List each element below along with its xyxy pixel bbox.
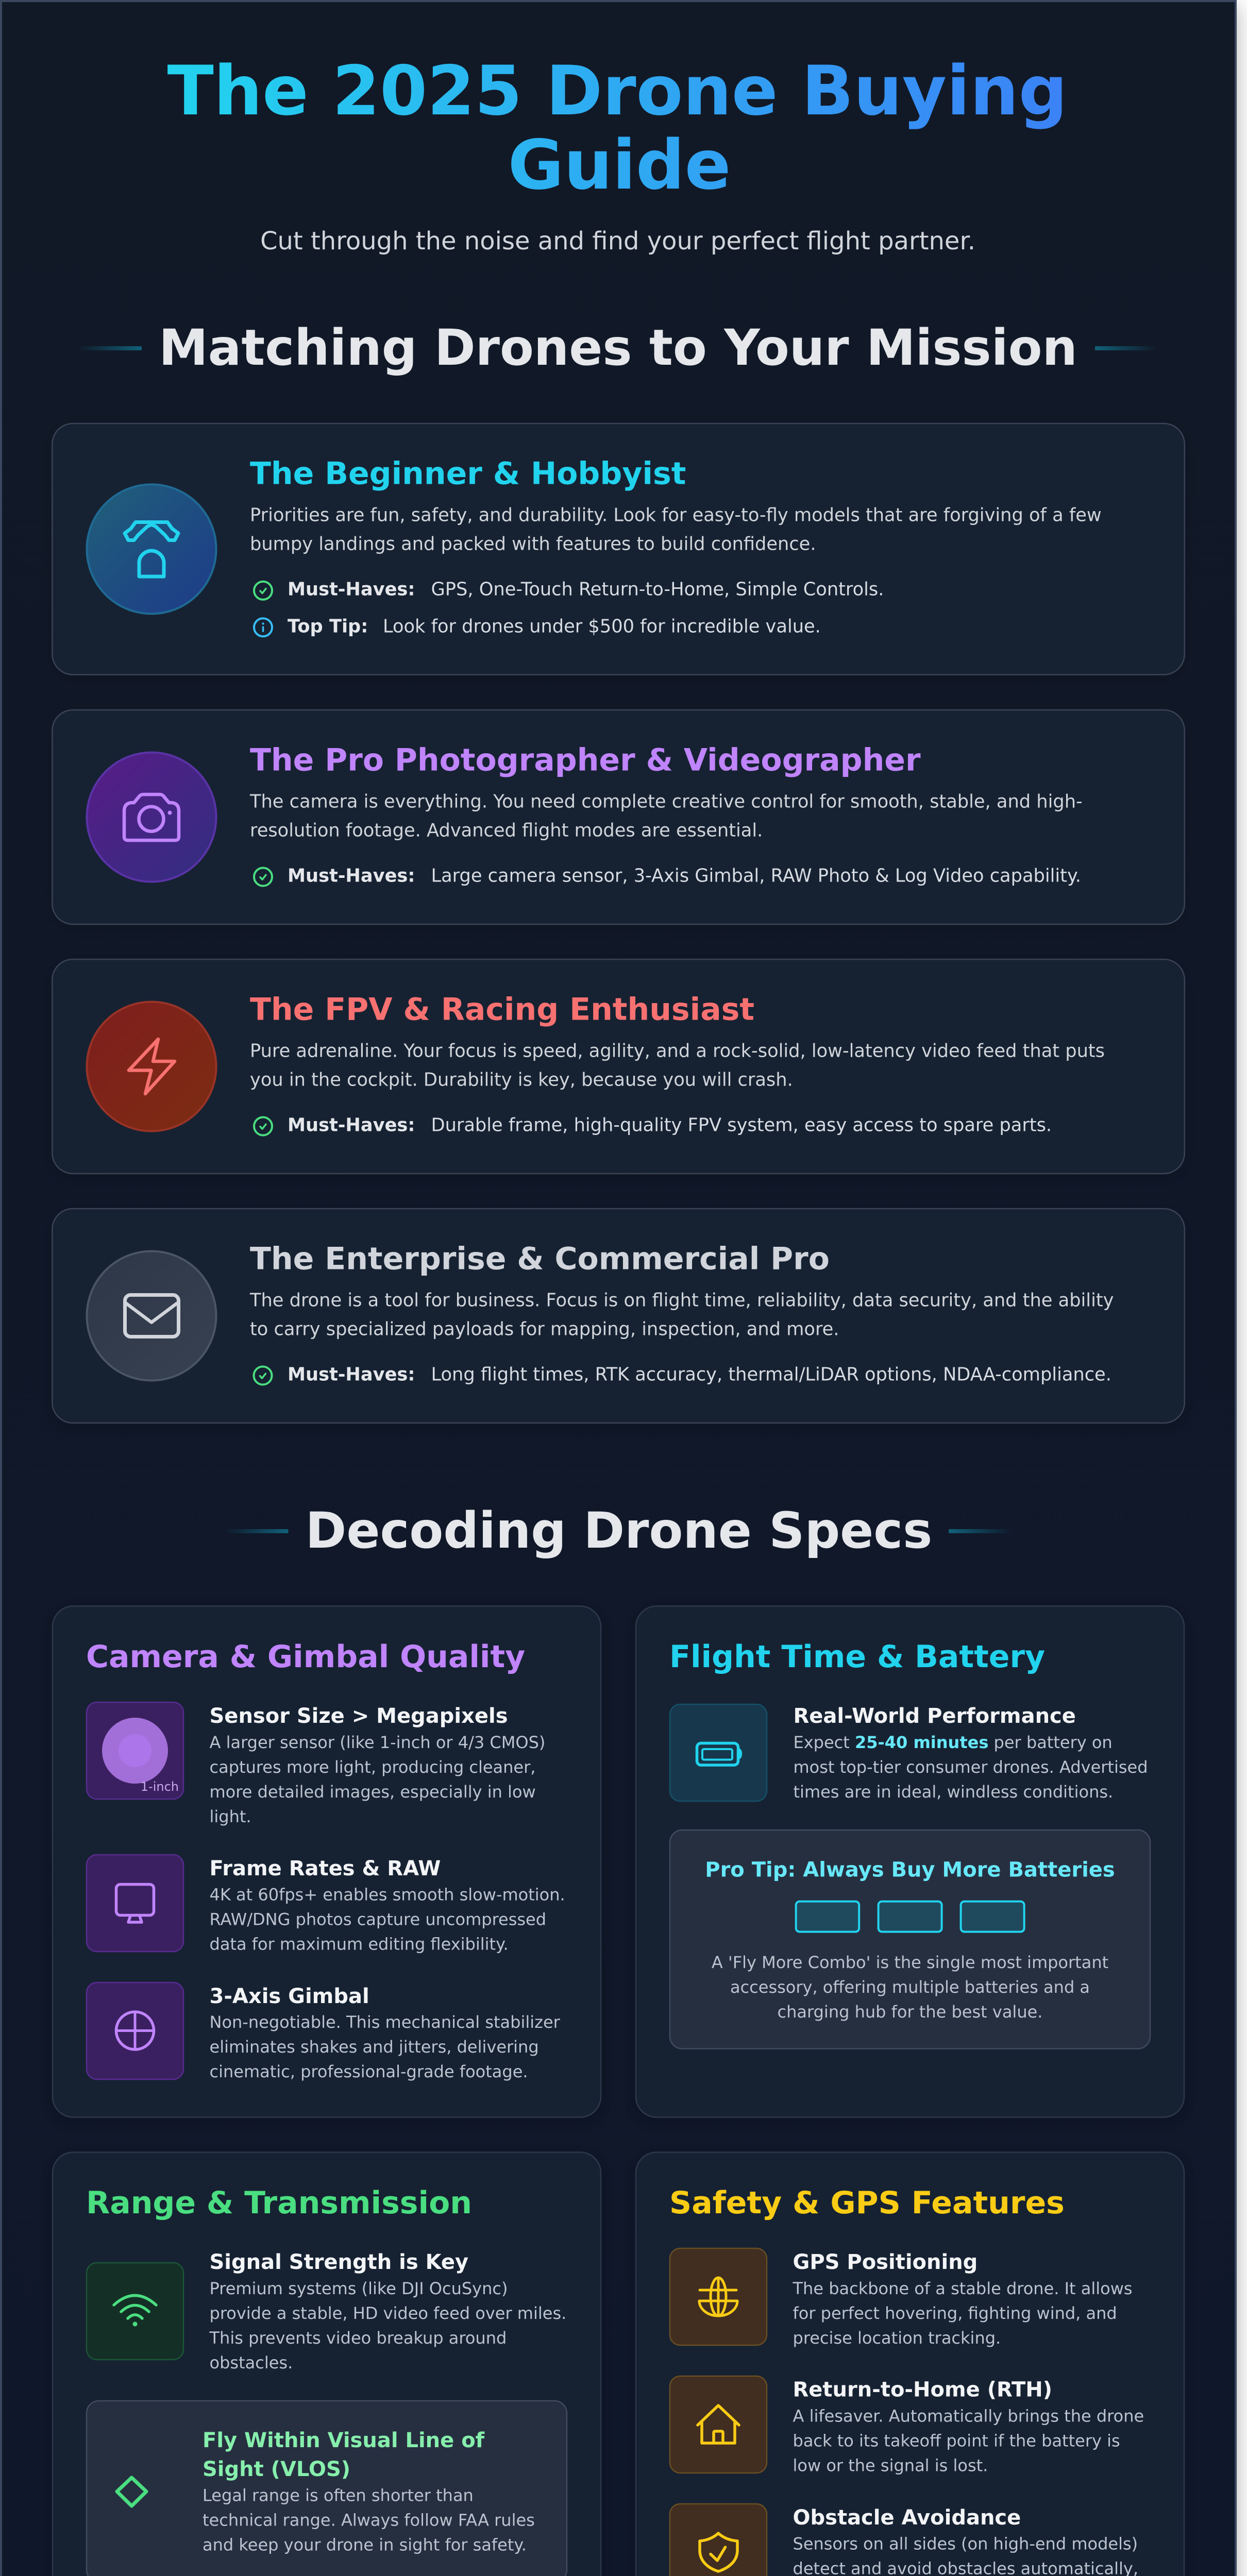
callout: vlos: technical range. Always follow FAA rules [203,2510,535,2530]
item: obstacle avoidance [670,2504,1138,2576]
item: sensor size: more detailed images, especially in low [209,1782,536,1802]
heading: decoding specs: Decoding Drone Specs [306,1502,932,1560]
item: sensor size: light. [209,1807,251,1826]
icon: camera [87,752,216,882]
title: Guide [508,126,731,205]
item: rth: Return-to-Home (RTH) [793,2378,1052,2402]
card title: The Beginner & Hobbyist [250,455,686,492]
panel: camera and gimbal [53,1606,601,2117]
callout: pro tip: accessory, offering multiple batteries and a [730,1977,1090,1997]
panel title: Camera & Gimbal Quality [86,1639,525,1675]
item: sensor size: A larger sensor (like 1-inch or 4/3 CMOS) [209,1733,545,1752]
top tip row: Top Tip: [288,616,368,637]
item: sensor size [87,1702,545,1826]
item: real-world performance: most top-tier consumer drones. Advertised [794,1757,1148,1777]
callout: pro tip: Pro Tip: Always Buy More Batteries [705,1858,1115,1882]
callout: vlos: Fly Within Visual Line of [203,2429,485,2452]
title [167,52,1067,205]
item: real-world performance: Real-World Performance [794,1704,1076,1728]
item: rth: A lifesaver. Automatically brings the drone [793,2406,1144,2426]
card description: The camera is everything. You need complete creative control for smooth, stable, and high- [249,791,1083,812]
item: rth: back to its takeoff point if the battery is [793,2431,1120,2450]
item: gimbal: 3-Axis Gimbal [209,1985,369,2008]
card description: to carry specialized payloads for mapping, inspection, and more. [250,1319,839,1340]
callout: vlos: Sight (VLOS) [203,2458,350,2481]
icon: diamond [117,2478,146,2506]
heading: matching drones: Matching Drones to Your Mission [159,319,1077,377]
subtitle: Cut through the noise and find your perfect flight partner. [260,227,975,256]
item: real-world performance: times are in ideal, windless conditions. [794,1782,1113,1802]
must-haves row: GPS, One-Touch Return-to-Home, Simple Controls. [431,579,884,600]
panel: beginner card [52,423,1185,675]
callout: pro tip: charging hub for the best value. [778,2002,1042,2022]
item: signal strength [87,2250,566,2372]
card title: The FPV & Racing Enthusiast [250,992,754,1028]
card description [250,1041,1105,1091]
card description [250,505,1102,555]
item: gimbal [87,1982,561,2081]
item: gps: GPS Positioning [793,2250,978,2274]
card description: resolution footage. Advanced flight modes are essential. [250,820,763,841]
card title: The Enterprise & Commercial Pro [250,1241,830,1277]
item: frame rates: data for maximum editing flexibility. [209,1934,509,1954]
card description: Pure adrenaline. Your focus is speed, agility, and a rock-solid, low-latency video feed that puts [250,1041,1105,1061]
item: signal strength: This prevents video breakup around [209,2328,507,2348]
item: real-world performance: Expect 25-40 minutes per battery on [794,1733,1113,1752]
card description: The drone is a tool for business. Focus is on flight time, reliability, data security, and the ability [249,1290,1114,1311]
item: gps: precise location tracking. [793,2328,1001,2348]
must-haves row: Long flight times, RTK accuracy, thermal/LiDAR options, NDAA-compliance. [431,1364,1111,1385]
callout: vlos: Legal range is often shorter than [203,2485,474,2505]
item: signal strength: obstacles. [209,2353,293,2372]
item: sensor size: captures more light, producing cleaner, [209,1757,535,1777]
item: gimbal: eliminates shakes and jitters, delivering [209,2037,539,2057]
icon: lightning bolt [87,1002,216,1131]
item: obstacle avoidance: Obstacle Avoidance [793,2506,1021,2530]
item: sensor size: Sensor Size > Megapixels [209,1704,508,1728]
item: gimbal: Non-negotiable. This mechanical stabilizer [209,2012,561,2032]
item: rth: low or the signal is lost. [793,2455,988,2475]
panel: range and transmission [53,2153,601,2576]
item: frame rates: RAW/DNG photos capture uncompressed [209,1909,546,1929]
item: real-world performance [670,1704,1148,1802]
item: obstacle avoidance: Sensors on all sides (on high-end models) [793,2534,1138,2553]
icon: envelope [87,1251,216,1381]
card description [249,1290,1114,1340]
callout: vlos: and keep your drone in sight for safety. [203,2535,527,2554]
must-haves row: Must-Haves: [288,1364,415,1385]
panel: flight time and battery [636,1606,1184,2117]
item: gps: for perfect hovering, fighting wind, and [793,2303,1117,2323]
item: signal strength: provide a stable, HD video feed over miles. [209,2303,566,2323]
panel title: Flight Time & Battery [669,1639,1045,1675]
panel: safety and gps [636,2153,1192,2576]
card description: Priorities are fun, safety, and durability. Look for easy-to-fly models that are forgiving of a few [250,505,1102,526]
item: frame rates [87,1855,565,1954]
panel: enterprise card [52,1209,1185,1423]
title: The 2025 Drone Buying [167,52,1067,131]
must-haves row: Must-Haves: [288,1115,415,1136]
must-haves row: Durable frame, high-quality FPV system, easy access to spare parts. [431,1115,1052,1136]
card title: The Pro Photographer & Videographer [250,742,921,778]
battery icons [796,1902,1024,1932]
item: gimbal: cinematic, professional-grade footage. [209,2062,528,2081]
item: frame rates: Frame Rates & RAW [209,1857,441,1880]
must-haves row: Must-Haves: [288,579,415,600]
callout: vlos [87,2401,567,2576]
item: sensor size: 1-inch [141,1780,179,1794]
panel title: Range & Transmission [86,2185,472,2221]
card description: bumpy landings and packed with features to build confidence. [250,534,816,555]
card description [249,791,1083,841]
top tip row: Look for drones under $500 for incredible value. [383,616,821,637]
item: rth [670,2376,1144,2475]
panel title: Safety & GPS Features [669,2185,1065,2221]
callout: pro tip: A 'Fly More Combo' is the single most important [712,1953,1108,1972]
panel: pro photographer card [52,710,1185,924]
callout: pro tip [670,1830,1150,2048]
must-haves row: Must-Haves: [288,866,415,887]
item: gps [670,2248,1133,2348]
card description: you in the cockpit. Durability is key, because you will crash. [250,1070,793,1091]
panel: fpv card [52,959,1185,1174]
item: signal strength: Signal Strength is Key [209,2250,468,2274]
item: frame rates: 4K at 60fps+ enables smooth slow-motion. [209,1885,565,1904]
item: signal strength: Premium systems (like DJI OcuSync) [209,2279,508,2298]
must-haves row: Large camera sensor, 3-Axis Gimbal, RAW Photo & Log Video capability. [431,866,1081,887]
item: gps: The backbone of a stable drone. It allows [793,2279,1133,2298]
icon: beginner circle [87,484,216,614]
